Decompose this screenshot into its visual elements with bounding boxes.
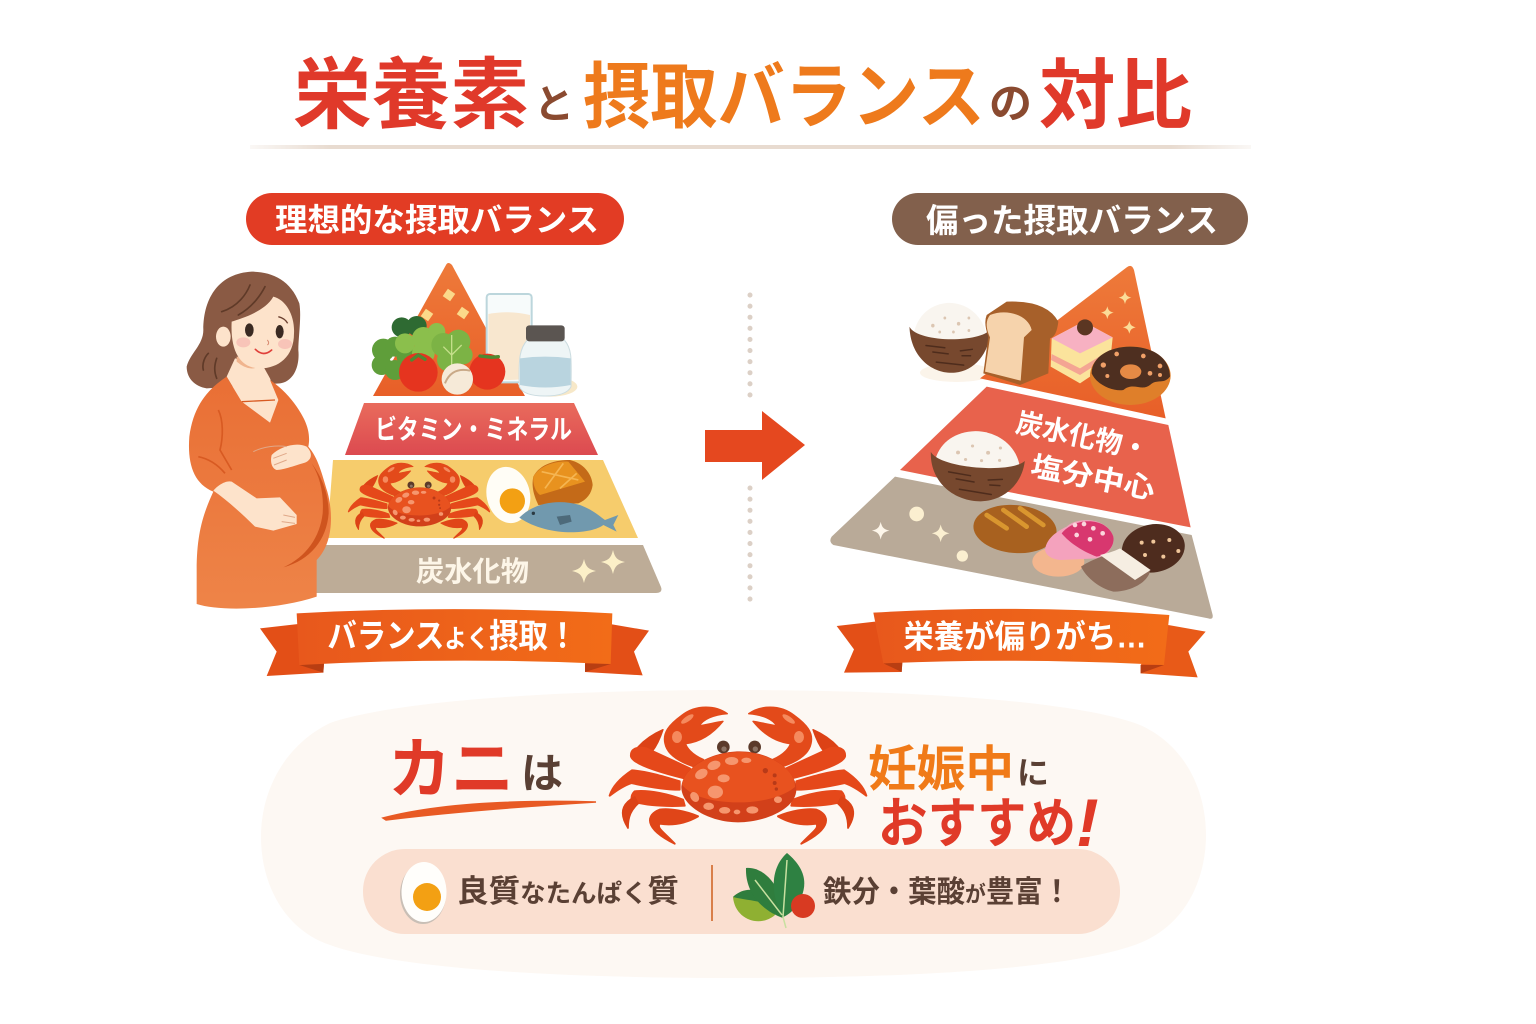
panel: crab recommendation [261, 690, 1206, 978]
ribbon: balanced intake: バランスよく摂取！ [327, 619, 577, 656]
panel: ideal pyramid [187, 263, 661, 676]
heading: crab is [383, 732, 596, 820]
heading: recommended during pregnancy: 妊娠中 [868, 743, 1014, 797]
title: 摂取バランス [583, 58, 985, 138]
icon: large crab [610, 707, 866, 844]
panel: skewed pyramid [830, 266, 1213, 677]
food: vegetables, milk and supplements [372, 294, 577, 397]
ribbon: balanced intake [260, 609, 649, 676]
heading: recommended during pregnancy: おすすめ [878, 794, 1076, 854]
food: breads and sweets [971, 501, 1189, 592]
title [293, 51, 1192, 139]
food: crab [348, 463, 490, 538]
pyramid tier: carbohydrates [310, 545, 661, 593]
title: 対比 [1039, 54, 1192, 139]
food: rice bowl, bread, cake and donut [909, 302, 1171, 405]
pyramid tier: vitamins and minerals [345, 403, 598, 455]
pyramid tier: carbs and salt [900, 387, 1191, 527]
icon: egg [400, 862, 446, 924]
pyramid top tier [373, 263, 568, 396]
arrow [705, 411, 805, 480]
pyramid tier: protein [327, 460, 638, 538]
heading pill: skewed balance: 偏った摂取バランス [926, 202, 1218, 239]
benefits pill [363, 849, 1120, 934]
food: egg, tofu and fish [481, 460, 618, 532]
pregnant woman [187, 272, 331, 609]
heading: crab is: は [521, 750, 563, 797]
pyramid bottom tier [830, 477, 1213, 619]
ribbon: skewed nutrition: 栄養が偏りがち… [903, 619, 1147, 655]
title: 栄養素 [293, 51, 529, 139]
title: と [534, 83, 574, 127]
pyramid tier: carbs and salt: 炭水化物・ [1013, 407, 1152, 466]
heading pill: skewed balance [892, 193, 1248, 245]
text: rich in iron and folic acid: 鉄分・葉酸が豊富！ [823, 876, 1071, 909]
pyramid tier: carbs and salt: 塩分中心 [1028, 450, 1158, 505]
heading: recommended during pregnancy: ! [1076, 785, 1099, 861]
pyramid tier: carbohydrates: 炭水化物 [416, 556, 529, 587]
ribbon: skewed nutrition [837, 609, 1206, 677]
heading: recommended during pregnancy: に [1017, 755, 1049, 791]
heading: recommended during pregnancy [868, 743, 1099, 861]
heading pill: ideal balance [246, 193, 624, 245]
food: second rice bowl [928, 428, 1027, 504]
heading: crab is: カニ [388, 732, 514, 806]
title: の [989, 80, 1032, 127]
text: quality protein: 良質なたんぱく質 [457, 874, 679, 909]
pyramid tier: vitamins and minerals: ビタミン・ミネラル [375, 415, 572, 445]
heading pill: ideal balance: 理想的な摂取バランス [275, 202, 599, 238]
pyramid top tier [920, 266, 1166, 418]
divider: dotted line lower [748, 488, 752, 608]
divider: dotted line upper [748, 295, 752, 398]
icon: spinach and berry [733, 853, 815, 928]
